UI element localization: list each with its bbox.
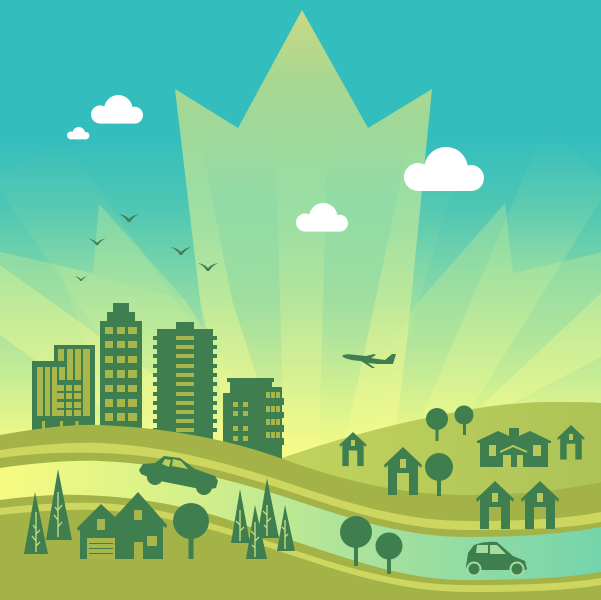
hatchback car	[466, 542, 527, 576]
family house with garage	[77, 492, 167, 559]
cloud upper left	[91, 95, 143, 124]
sedan car	[139, 456, 218, 495]
building: stepped tower	[100, 303, 142, 432]
round trees	[173, 406, 474, 574]
upper road band	[0, 425, 601, 600]
maple leaf left lobe	[0, 204, 300, 480]
river of light	[0, 461, 601, 600]
building group: twin slatted towers	[32, 345, 95, 430]
airplane	[342, 354, 396, 368]
cloud large right	[404, 147, 484, 191]
rays of light	[0, 123, 601, 480]
small houses on the hills	[340, 425, 585, 529]
maple leaf center	[175, 10, 432, 480]
wide ranch house	[477, 428, 551, 467]
pine trees	[24, 469, 295, 559]
cloud center	[296, 203, 348, 232]
birds	[75, 214, 218, 281]
upper road stripe	[0, 443, 601, 530]
maple leaf right lobe	[300, 203, 601, 480]
building: low apartment block	[223, 378, 284, 462]
light bands inside the maple leaf	[175, 89, 432, 480]
back hill	[250, 402, 601, 600]
cloud small left	[67, 127, 89, 139]
house windows	[351, 434, 573, 502]
building: balcony tower	[153, 322, 217, 450]
lower ground	[0, 495, 601, 600]
lower road stripe	[0, 503, 601, 592]
